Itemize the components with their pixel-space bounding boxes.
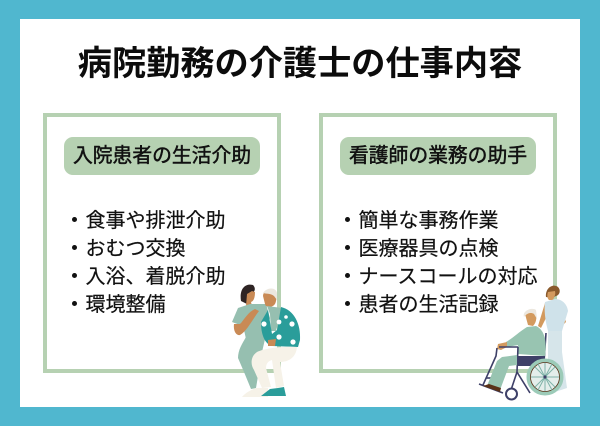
text: 食事や排泄介助 <box>86 210 226 232</box>
large wheel <box>528 360 562 394</box>
text: 環境整備 <box>86 294 166 316</box>
patient hair <box>524 309 537 319</box>
patient legs <box>487 355 517 390</box>
caregiver arm <box>234 309 259 335</box>
caregiver face <box>547 291 555 300</box>
caregiver shirt <box>545 299 568 331</box>
panel: patient care outline <box>43 113 281 373</box>
caregiver shoes <box>242 388 268 397</box>
old man sweater <box>261 307 300 347</box>
text: 医療器具の点検 <box>358 238 498 260</box>
text: 入浴、着脱介助 <box>86 266 226 288</box>
wheelchair frame <box>479 347 530 393</box>
panel: nurse assistance outline <box>319 113 557 373</box>
text: おむつ交換 <box>86 238 186 260</box>
patient torso <box>506 326 546 356</box>
old man collar <box>267 306 282 331</box>
caregiver arms <box>538 303 566 335</box>
caregiver face <box>246 291 255 306</box>
list: nurse assistance duties <box>345 210 538 316</box>
caregiver hair <box>546 286 560 298</box>
heading: patient care <box>64 137 260 175</box>
caregiver hair <box>241 285 255 304</box>
text: ナースコールの対応 <box>358 266 538 288</box>
text: 簡単な事務作業 <box>358 210 498 232</box>
wheelchair seat <box>517 356 545 366</box>
heading: patient care: 入院患者の生活介助 <box>73 145 251 167</box>
patient shoes <box>483 384 501 392</box>
heading: nurse assistance: 看護師の業務の助手 <box>349 145 527 167</box>
title: 病院勤務の介護士の仕事内容 <box>78 45 522 83</box>
caregiver legs <box>238 335 266 389</box>
old man hair <box>263 288 277 300</box>
heading: nurse assistance <box>340 137 536 175</box>
sweater dots <box>261 315 296 345</box>
caregiver sleeve <box>232 308 247 325</box>
list: patient care duties <box>72 210 226 316</box>
small wheel <box>506 388 517 400</box>
old man shoes <box>261 387 286 396</box>
old man legs <box>252 347 297 388</box>
wheelchair push handle <box>544 333 546 362</box>
old man head <box>263 290 276 307</box>
patient head <box>525 310 536 326</box>
patient hand <box>497 342 507 350</box>
text: 患者の生活記録 <box>358 294 498 316</box>
old man hand <box>268 339 276 346</box>
caregiver torso <box>238 304 270 339</box>
caregiver trousers <box>548 331 567 392</box>
